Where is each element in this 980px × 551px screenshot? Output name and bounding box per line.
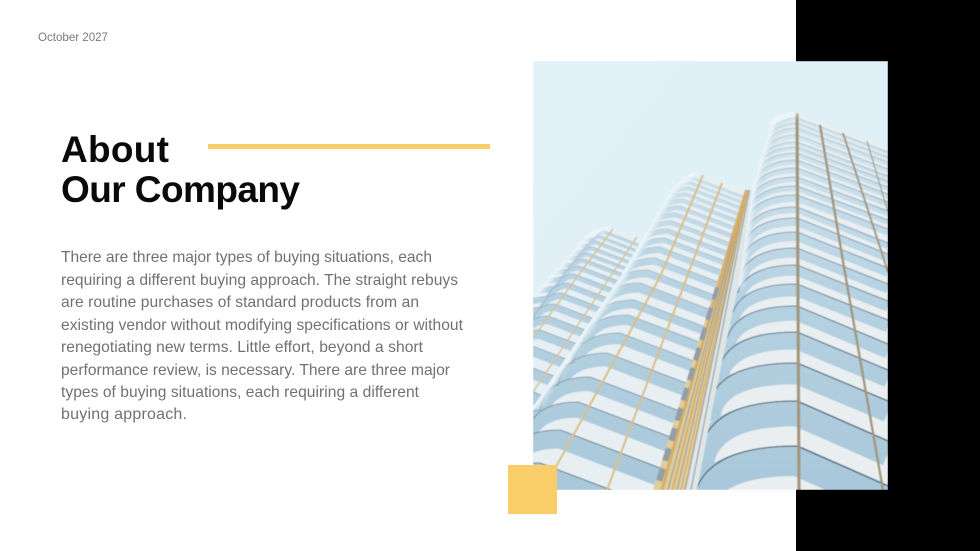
body paragraph: performance review, is necessary. There are three major (61, 362, 450, 379)
body paragraph: There are three major types of buying situations, each (61, 249, 432, 266)
yellow accent line (208, 144, 490, 149)
black side panel (796, 0, 980, 551)
yellow accent square (508, 465, 557, 514)
left tower edge highlight (533, 226, 607, 295)
body paragraph: buying approach. (61, 406, 187, 423)
title: Our Company (61, 169, 300, 210)
body paragraph: renegotiating new terms. Little effort, beyond a short (61, 339, 424, 356)
left tower (533, 228, 639, 406)
title (61, 129, 300, 210)
middle tower edge highlight (533, 171, 695, 407)
body paragraph: are routine purchases of standard products from an (61, 294, 419, 311)
body paragraph: types of buying situations, each requiring a different (61, 384, 420, 401)
body paragraph: existing vendor without modifying specifications or without (61, 317, 464, 334)
sky (533, 61, 888, 294)
right tower edge highlight (738, 112, 797, 287)
date label: October 2027 (38, 31, 108, 44)
gold recessed column (653, 190, 752, 490)
title: About (61, 129, 169, 170)
middle tower (533, 172, 746, 490)
building photo (533, 61, 888, 490)
right tower (696, 112, 888, 490)
body paragraph (61, 249, 464, 423)
body paragraph: requiring a different buying approach. The straight rebuys (61, 272, 458, 289)
